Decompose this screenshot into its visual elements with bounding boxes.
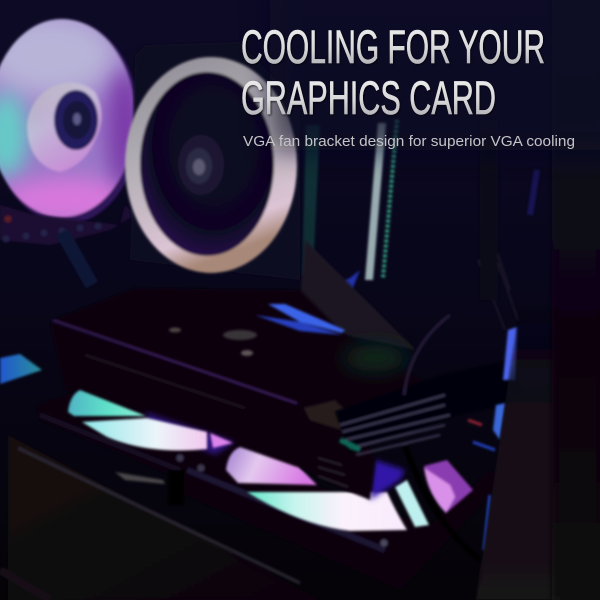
RAM light strips [302,120,397,296]
panel: fan bracket [130,42,300,280]
panel: lower fan frames [36,390,505,590]
icon: ring fan hub [178,135,224,195]
icon: lower fan two blades [226,447,473,531]
panel: graphics card top plate [52,288,440,440]
panel: card bracket plate [300,240,416,350]
icon: left fan hub [54,90,98,150]
icon: large ring fan [125,57,297,273]
panel: left blue light [0,354,42,384]
navy title haze [270,0,600,150]
icon: left fan crescent [27,82,102,172]
connector housing [300,400,375,500]
panel: graphics card shroud [50,320,300,470]
panel: left fan [0,17,136,222]
violet connector glow [370,460,405,500]
green board glow [343,345,407,371]
subtitle: VGA fan bracket design for superior VGA cooling [243,134,575,150]
icon: lower fan one blades [68,390,233,450]
power cable bundle [340,315,520,560]
title [241,20,545,124]
right motherboard hatching [478,120,537,330]
side blue light strips [468,327,517,550]
panel: case floor [0,435,320,600]
blue reflections on plate [169,304,345,356]
violet blade glow [145,412,235,455]
panel: case right edge [552,0,600,600]
panel: case side panel [476,300,560,600]
left fan base with pins [0,205,135,285]
